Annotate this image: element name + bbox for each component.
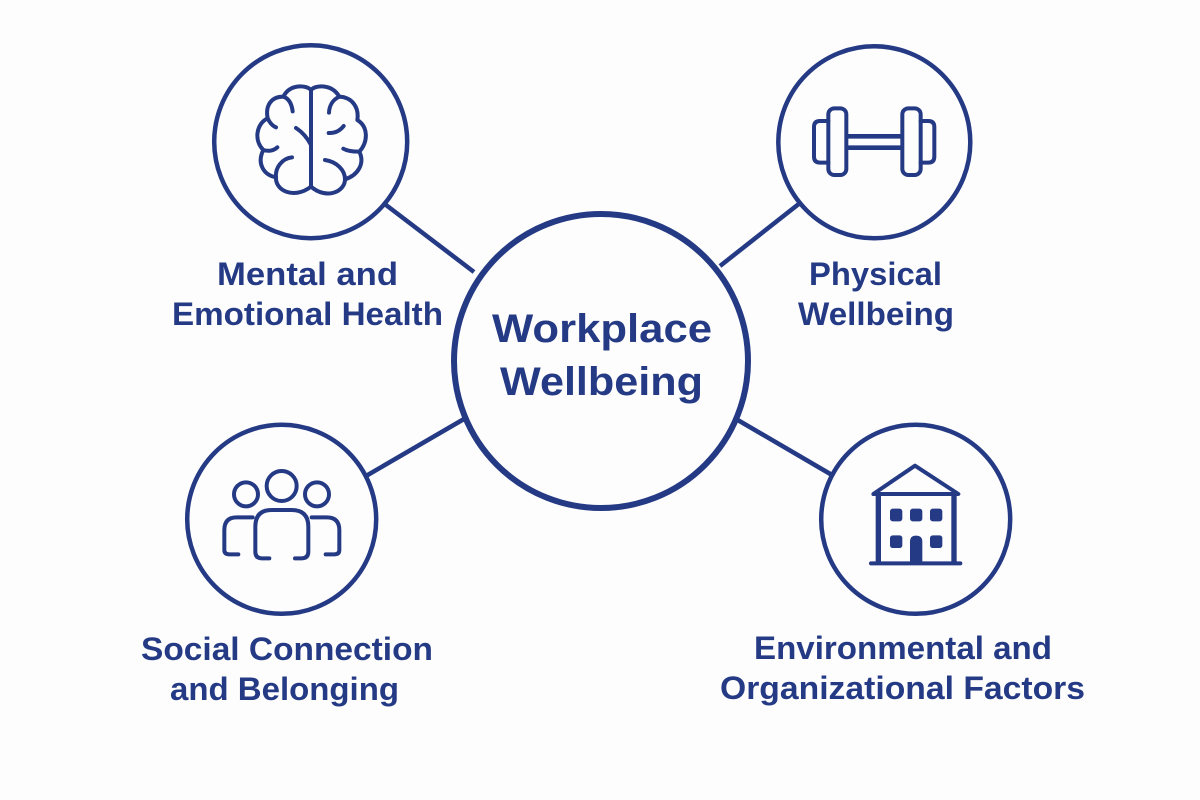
- label: Environmental and Organizational Factors: Environmental and: [754, 630, 1052, 666]
- label: Mental and Emotional Health: Emotional Health: [172, 296, 443, 332]
- icon: dumbbell: [814, 108, 934, 175]
- label: Physical Wellbeing: Physical: [809, 256, 942, 292]
- label: Mental and Emotional Health: [172, 256, 443, 332]
- node circle: mental health: [214, 45, 407, 238]
- node circle: environmental factors: [821, 425, 1010, 614]
- central hub: Workplace Wellbeing: Workplace: [492, 307, 712, 351]
- connector: hub to physical wellbeing: [720, 203, 800, 266]
- label: Mental and Emotional Health: Mental and: [217, 256, 398, 292]
- label: Environmental and Organizational Factors: Organizational Factors: [720, 670, 1085, 706]
- connector: hub to mental health: [386, 205, 474, 272]
- label: Physical Wellbeing: Wellbeing: [798, 296, 954, 332]
- central hub: Workplace Wellbeing: Wellbeing: [500, 360, 703, 404]
- label: Social Connection and Belonging: [141, 631, 433, 707]
- connector: hub to environmental factors: [736, 419, 832, 475]
- connector: hub to social connection: [366, 419, 464, 476]
- node circle: physical wellbeing: [778, 46, 970, 238]
- central hub: Workplace Wellbeing: [454, 214, 748, 508]
- label: Social Connection and Belonging: and Belonging: [170, 671, 399, 707]
- label: Physical Wellbeing: [798, 256, 954, 332]
- label: Social Connection and Belonging: Social Connection: [141, 631, 433, 667]
- icon: group of people: [224, 471, 339, 558]
- icon: brain: [257, 86, 366, 193]
- label: Environmental and Organizational Factors: [720, 630, 1085, 706]
- icon: building: [871, 466, 960, 563]
- node circle: social connection: [187, 425, 376, 614]
